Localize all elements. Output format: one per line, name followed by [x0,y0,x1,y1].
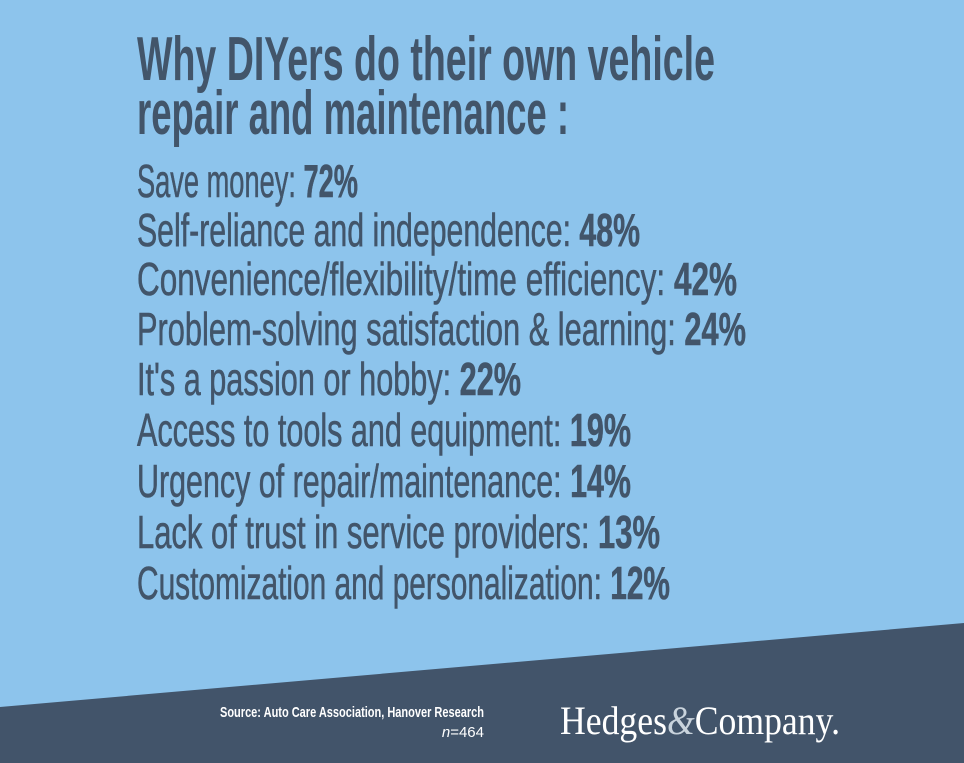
list of reasons: Customization and personalization: 12% [137,557,670,609]
dark footer band [0,623,964,763]
source note [220,704,484,741]
list of reasons: Urgency of repair/maintenance: 14% [137,455,631,507]
list of reasons: Self-reliance and independence: 48% [137,204,640,256]
list of reasons: Lack of trust in service providers: 13% [137,506,660,558]
list of reasons: Access to tools and equipment: 19% [137,404,631,456]
title: repair and maintenance : [137,79,569,148]
list of reasons [137,155,746,609]
title [137,25,715,148]
list of reasons: It's a passion or hobby: 22% [137,353,521,405]
list of reasons: Convenience/flexibility/time efficiency: 42% [137,253,737,305]
source note: n=464 [442,724,484,741]
source note: Source: Auto Care Association, Hanover Research [220,704,484,721]
list of reasons: Problem-solving satisfaction & learning: 24% [137,303,746,355]
list of reasons: Save money: 72% [137,155,358,207]
logo: Hedges & Company: Hedges&Company. [560,698,840,743]
